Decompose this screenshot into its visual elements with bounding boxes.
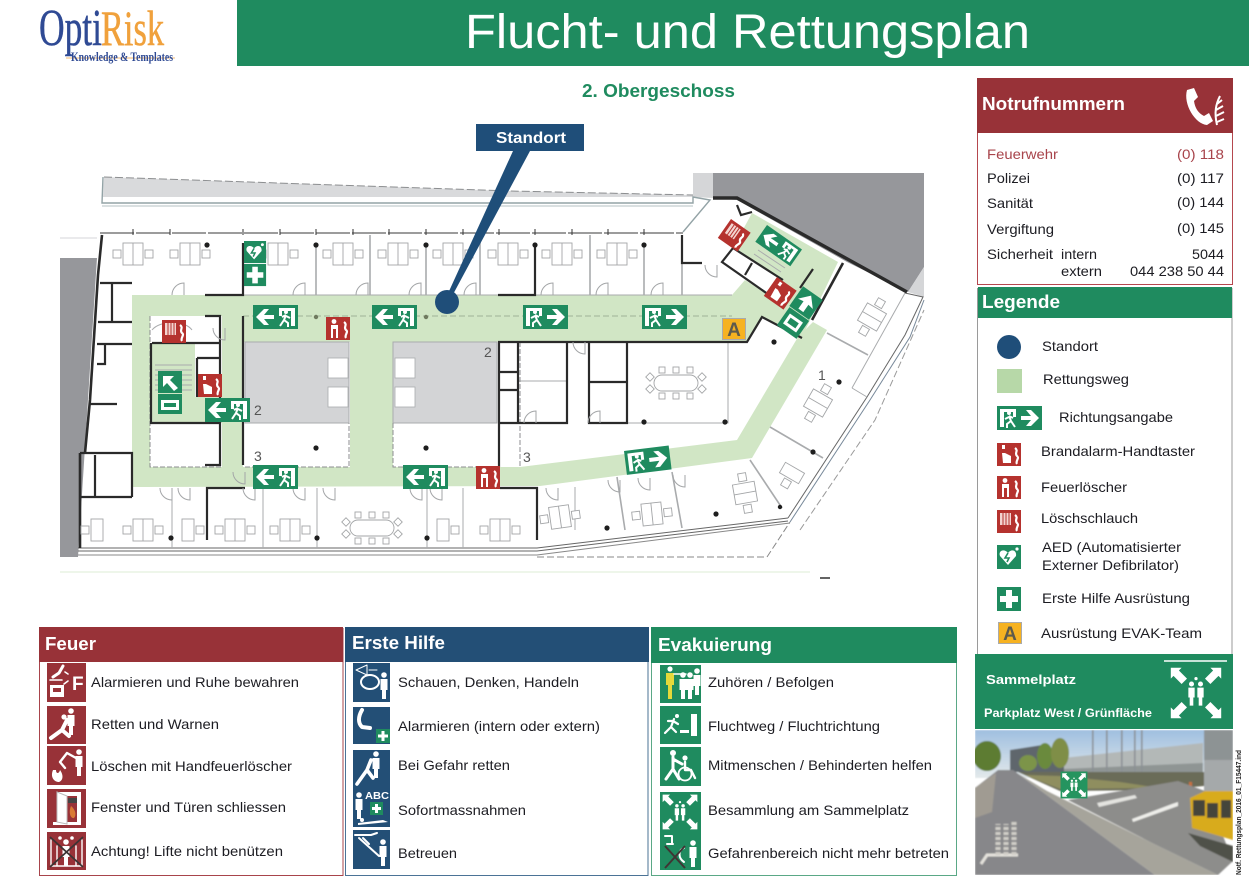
exit signs bbox=[158, 225, 823, 489]
emergency rows: Polizei bbox=[987, 170, 1030, 186]
zone numbers: 2 bbox=[484, 344, 492, 360]
icon: extinguish bbox=[47, 746, 86, 785]
emergency header bbox=[977, 78, 1233, 133]
legend: Erste Hilfe: Erste Hilfe Ausrüstung bbox=[1042, 590, 1190, 606]
icon: assembly sign in photo bbox=[1061, 772, 1087, 798]
text: immediate measures: Sofortmassnahmen bbox=[398, 802, 526, 818]
icon: alert bbox=[353, 707, 390, 744]
floor plan bbox=[60, 124, 924, 578]
legend: Rettungsweg: Rettungsweg bbox=[1043, 371, 1129, 387]
text: assembly: Besammlung am Sammelplatz bbox=[708, 802, 909, 818]
legend: AED: AED (Automatisierter bbox=[1042, 539, 1181, 555]
zone numbers: 3 bbox=[254, 448, 262, 464]
pillars bbox=[168, 242, 842, 541]
emergency header: Notrufnummern bbox=[982, 94, 1125, 114]
legend: Löschschlauch: Löschschlauch bbox=[1041, 510, 1138, 526]
legend: Brandalarm-Handtaster: Brandalarm-Handtaster bbox=[1041, 443, 1195, 459]
title banner bbox=[237, 0, 1249, 66]
legend: Feuerlöscher: Feuerlöscher bbox=[1041, 479, 1127, 495]
emergency rows: intern bbox=[1061, 246, 1097, 262]
emergency rows: (0) 117 bbox=[1177, 170, 1224, 186]
legend: AED bbox=[997, 539, 1181, 573]
logo bbox=[39, 0, 175, 64]
legend: Standort bbox=[997, 335, 1098, 359]
escape route bbox=[132, 213, 838, 487]
logo: Opti bbox=[39, 0, 102, 57]
zone numbers: 1 bbox=[818, 367, 826, 383]
icon: listen and follow bbox=[660, 665, 701, 703]
logo: Knowledge & Templates bbox=[71, 49, 173, 64]
text: look: Schauen, Denken, Handeln bbox=[398, 674, 579, 690]
emergency rows: Sicherheit bbox=[987, 246, 1053, 262]
legend: AED: Externer Defibrilator) bbox=[1042, 557, 1179, 573]
emergency rows: 5044 bbox=[1192, 246, 1224, 262]
icon: close windows and doors bbox=[47, 789, 86, 828]
AED sign bbox=[244, 241, 266, 263]
legend: Brandalarm-Handtaster bbox=[997, 443, 1195, 466]
icon: escape route bbox=[660, 706, 701, 744]
panel: Feuer bbox=[39, 627, 343, 876]
Feuer header: Feuer bbox=[45, 634, 96, 654]
legend: Rettungsweg bbox=[997, 369, 1129, 393]
zone numbers bbox=[254, 344, 826, 465]
first aid sign bbox=[244, 264, 266, 286]
icon: assembly and danger zone bbox=[660, 792, 701, 870]
Erste Hilfe header bbox=[345, 627, 649, 662]
text: listen: Zuhören / Befolgen bbox=[708, 674, 834, 690]
Evakuierung header bbox=[651, 627, 957, 663]
zone numbers: 2 bbox=[254, 402, 262, 418]
fire equipment signs bbox=[162, 219, 797, 489]
icon: help others bbox=[660, 747, 701, 786]
icon: do not use lifts bbox=[47, 832, 86, 870]
legend: Feuerlöscher bbox=[997, 476, 1127, 499]
legend header bbox=[978, 287, 1232, 318]
text: alarm: Alarmieren und Ruhe bewahren bbox=[91, 674, 299, 690]
legend: Standort: Standort bbox=[1042, 338, 1098, 354]
legend: Richtungsangabe bbox=[997, 406, 1173, 430]
legend header: Legende bbox=[982, 292, 1060, 312]
text: help: Mitmenschen / Behinderten helfen bbox=[708, 757, 932, 773]
legend: EVAK-Team: Ausrüstung EVAK-Team bbox=[1041, 625, 1202, 641]
text: close: Fenster und Türen schliessen bbox=[91, 799, 286, 815]
Feuer header bbox=[39, 627, 343, 662]
icon: look think act bbox=[353, 663, 390, 702]
emergency rows: 044 238 50 44 bbox=[1130, 263, 1224, 279]
text: care: Betreuen bbox=[398, 845, 457, 861]
emergency rows: (0) 118 bbox=[1177, 146, 1224, 162]
neighbouring buildings bbox=[60, 173, 924, 578]
side reference text: Notf. Rettungsplan_2016_01_F15447.ind bbox=[1236, 750, 1243, 875]
furniture bbox=[81, 243, 892, 544]
walls bbox=[80, 198, 907, 548]
icon: rescue and immediate measures: ABC bbox=[365, 791, 389, 802]
panel: emergency numbers bbox=[977, 78, 1233, 284]
emergency rows: extern bbox=[1061, 263, 1102, 279]
floor label: 2. Obergeschoss bbox=[582, 81, 735, 101]
icon: alarm and stay calm: F bbox=[72, 674, 84, 695]
text: extinguish: Löschen mit Handfeuerlöscher bbox=[91, 758, 292, 774]
zone numbers: 3 bbox=[523, 449, 531, 465]
icon: alarm and stay calm bbox=[47, 663, 86, 702]
text: rescue: Retten und Warnen bbox=[91, 716, 219, 732]
legend: Löschschlauch bbox=[997, 510, 1138, 533]
title banner: Flucht- und Rettungsplan bbox=[465, 6, 1030, 59]
Evakuierung header: Evakuierung bbox=[658, 635, 772, 655]
EVAK team sign bbox=[722, 318, 746, 341]
icon: assembly point bbox=[1171, 668, 1221, 718]
location marker: Standort bbox=[496, 130, 567, 147]
legend: Erste Hilfe bbox=[997, 587, 1190, 611]
emergency rows: (0) 144 bbox=[1177, 194, 1224, 210]
text: lifts: Achtung! Lifte nicht benützen bbox=[91, 843, 283, 859]
logo: Risk bbox=[101, 0, 164, 56]
emergency rows: (0) 145 bbox=[1177, 220, 1224, 236]
emergency rows: Sanität bbox=[987, 195, 1033, 211]
legend: EVAK-Team bbox=[998, 622, 1202, 645]
emergency rows: Feuerwehr bbox=[987, 146, 1058, 162]
icon: rescue and warn bbox=[47, 706, 86, 744]
panel: Erste Hilfe bbox=[345, 627, 649, 876]
text: escape route: Fluchtweg / Fluchtrichtung bbox=[708, 718, 880, 734]
text: rescue: Bei Gefahr retten bbox=[398, 757, 510, 773]
emergency rows bbox=[987, 146, 1224, 279]
panel: Evakuierung bbox=[651, 627, 957, 876]
icon: care bbox=[353, 830, 390, 869]
panel: assembly point bbox=[975, 654, 1233, 729]
legend: Richtungsangabe: Richtungsangabe bbox=[1059, 409, 1173, 425]
central grey zones bbox=[245, 342, 497, 423]
icon: rescue and immediate measures bbox=[353, 750, 390, 827]
facade and thin lines bbox=[78, 177, 924, 557]
location marker bbox=[435, 124, 584, 314]
assembly point photo bbox=[975, 730, 1233, 875]
text: danger zone: Gefahrenbereich nicht mehr betreten bbox=[708, 845, 949, 861]
emergency rows: Vergiftung bbox=[987, 221, 1054, 237]
panel: assembly point: Parkplatz West / Grünfläche bbox=[984, 708, 1152, 720]
text: alert: Alarmieren (intern oder extern) bbox=[398, 718, 600, 734]
panel: assembly point: Sammelplatz bbox=[986, 672, 1077, 687]
Erste Hilfe header: Erste Hilfe bbox=[352, 633, 445, 653]
panel: legend bbox=[978, 287, 1232, 654]
doors bbox=[160, 265, 717, 500]
